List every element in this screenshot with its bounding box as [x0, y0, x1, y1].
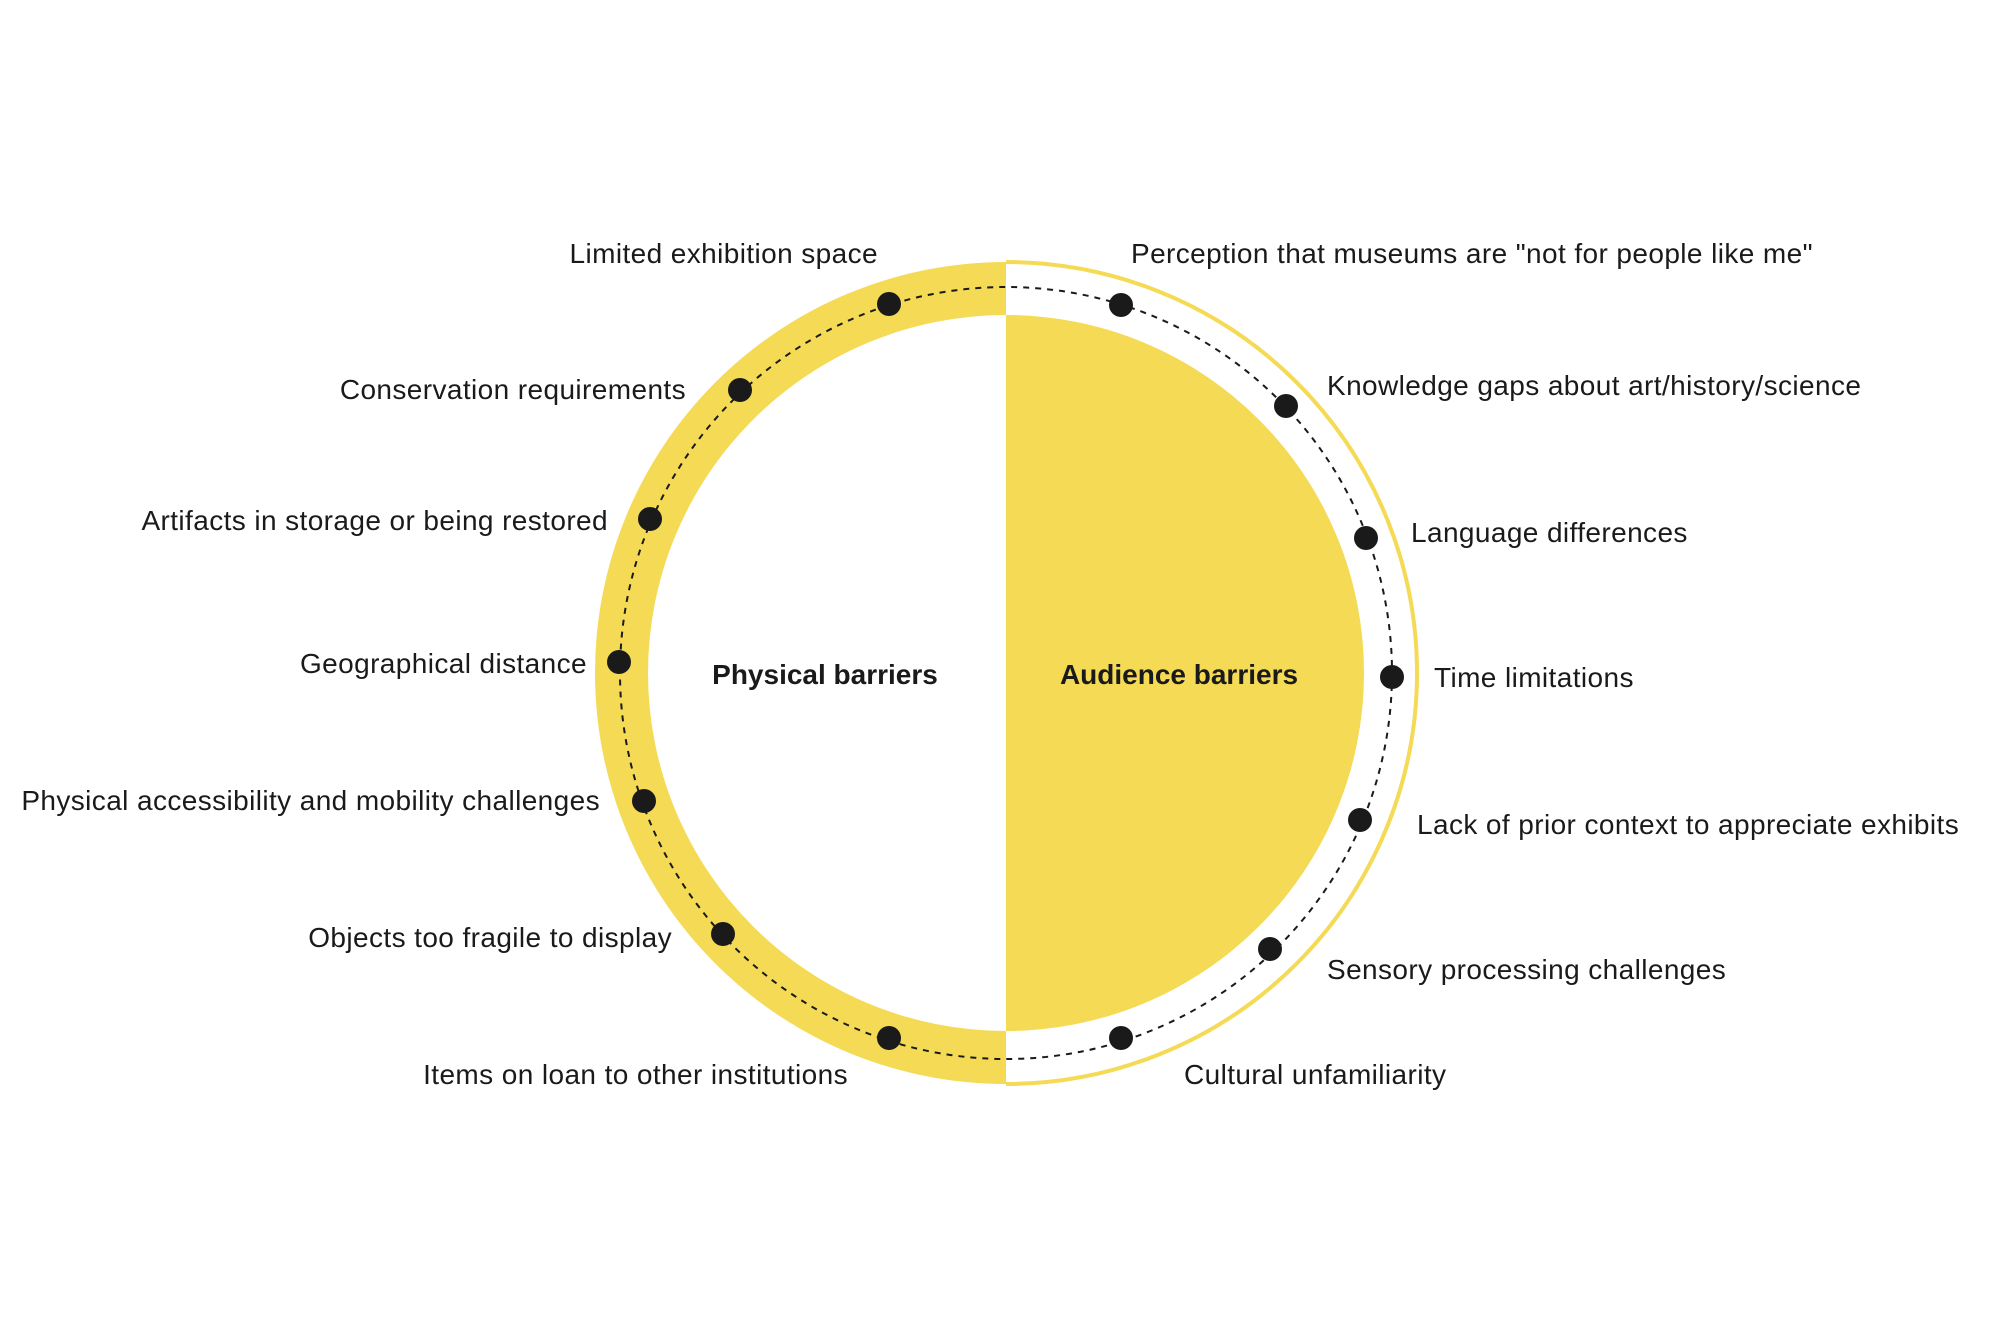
labels: audience barriers: Knowledge gaps about art/history/science: [1327, 370, 1861, 401]
dots: physical: [607, 292, 901, 1050]
labels: physical barriers: Objects too fragile to display: [308, 922, 672, 953]
labels: physical barriers: Limited exhibition space: [570, 238, 878, 269]
labels: physical barriers: Items on loan to other institutions: [423, 1059, 848, 1090]
panel: physical barriers half ring: [595, 262, 1006, 1084]
labels: audience barriers: Perception that museums are "not for people like me": [1131, 238, 1813, 269]
labels: audience barriers: Cultural unfamiliarity: [1184, 1059, 1446, 1090]
labels: audience barriers: Language differences: [1411, 517, 1688, 548]
panel: audience barriers half disc: [1006, 262, 1417, 1084]
labels: audience barriers: [1131, 238, 1959, 1090]
heading: Physical barriers: Physical barriers: [712, 659, 938, 690]
heading: Audience barriers: Audience barriers: [1060, 659, 1298, 690]
labels: physical barriers: [21, 238, 878, 1090]
labels: physical barriers: Artifacts in storage or being restored: [141, 505, 608, 536]
labels: physical barriers: Conservation requirements: [340, 374, 686, 405]
labels: physical barriers: Geographical distance: [300, 648, 587, 679]
dots: audience: [1109, 293, 1404, 1050]
labels: audience barriers: Time limitations: [1434, 662, 1634, 693]
labels: physical barriers: Physical accessibility and mobility challenges: [21, 785, 600, 816]
labels: audience barriers: Lack of prior context to appreciate exhibits: [1417, 809, 1959, 840]
labels: audience barriers: Sensory processing challenges: [1327, 954, 1726, 985]
